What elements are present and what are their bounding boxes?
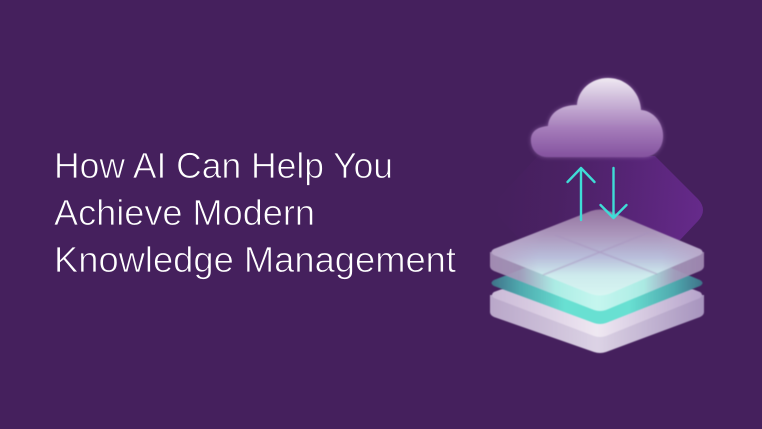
icon: cloud [531,78,663,157]
title: Knowledge Management [54,239,456,280]
stack: top translucent layer [490,210,704,311]
top layer grid [543,232,657,275]
title: How AI Can Help You [54,145,393,186]
stack: bottom layer [490,254,704,353]
illustration: cloud sync over layered data stack [490,78,704,353]
purple light beam [490,156,703,260]
title [54,145,456,280]
stack: teal glowing layer [492,240,702,324]
title: Achieve Modern [54,192,315,233]
icon: down arrow [600,168,626,218]
icon: up arrow [568,168,594,220]
